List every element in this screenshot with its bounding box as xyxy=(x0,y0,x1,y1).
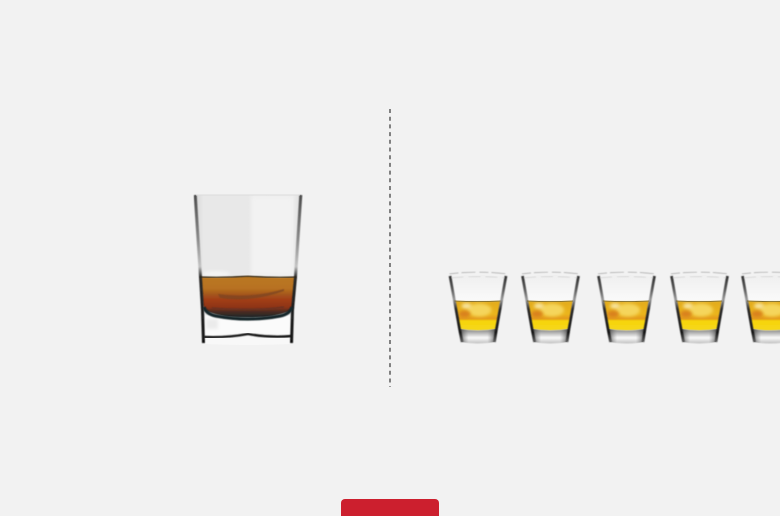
small glass 2 xyxy=(522,272,579,344)
lower streak xyxy=(212,307,284,310)
red button xyxy=(341,499,439,516)
base lines xyxy=(204,307,292,319)
glass base xyxy=(204,315,292,337)
small glass 4 xyxy=(671,272,728,344)
small glass 3 xyxy=(598,272,655,344)
row of small whisky glasses xyxy=(450,272,780,344)
small glass 1 xyxy=(450,272,506,344)
left edge xyxy=(195,195,204,343)
liquid streak xyxy=(218,289,284,299)
right edge xyxy=(292,195,301,343)
large whisky glass xyxy=(195,195,301,345)
dark liquid xyxy=(200,276,296,318)
small glass 5 xyxy=(742,272,780,344)
dashed divider xyxy=(389,109,391,387)
